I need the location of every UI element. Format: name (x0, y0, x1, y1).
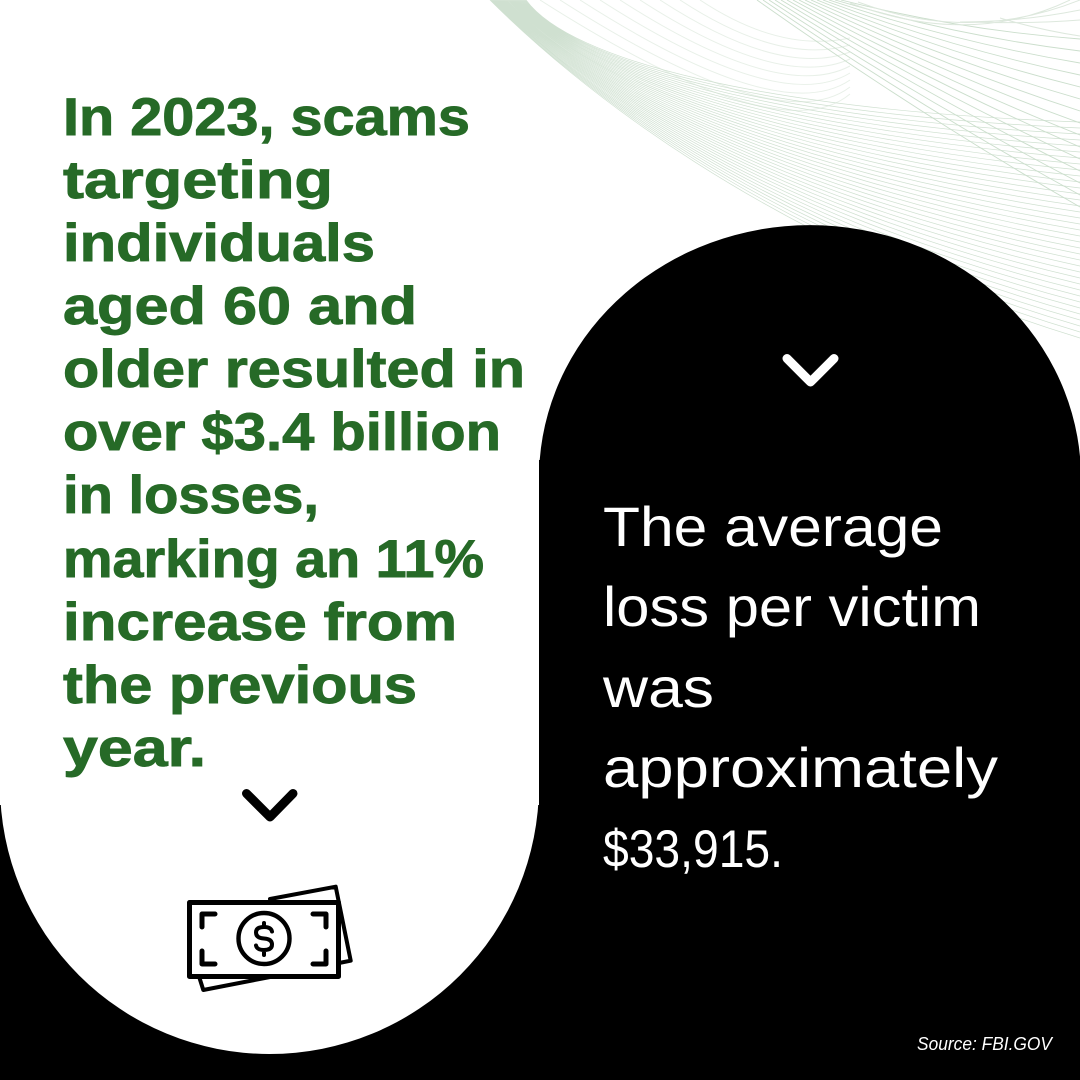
heading text: aged 60 and (63, 277, 417, 336)
source credit: Source: FBI.GOV (917, 1034, 1054, 1054)
icon: dollar banknotes (190, 887, 351, 990)
icon: chevron down in white panel (246, 794, 293, 817)
body text: approximately (603, 736, 998, 799)
decorative wave lines (490, 0, 1080, 338)
panel: white rounded pill (0, 785, 539, 1054)
heading text: the previous (63, 656, 417, 715)
icon: chevron down in black panel (787, 358, 834, 382)
body text: The average (603, 495, 943, 558)
heading text: In 2023, scams (63, 88, 470, 147)
heading text: targeting (63, 151, 333, 210)
body text: $33,915. (603, 820, 783, 879)
heading text: year. (63, 719, 206, 778)
heading text: individuals (63, 214, 375, 273)
body text: was (602, 656, 714, 719)
body text: loss per victim (603, 575, 981, 638)
heading text: in losses, (63, 466, 319, 525)
body text (602, 495, 998, 879)
panel: black rounded pill (539, 225, 1080, 1080)
heading text: older resulted in (63, 340, 525, 399)
heading text (63, 88, 525, 778)
heading text: over $3.4 billion (63, 403, 501, 462)
heading text: marking an 11% (63, 530, 484, 589)
black background lower band (0, 805, 545, 1080)
heading text: increase from (63, 593, 457, 652)
